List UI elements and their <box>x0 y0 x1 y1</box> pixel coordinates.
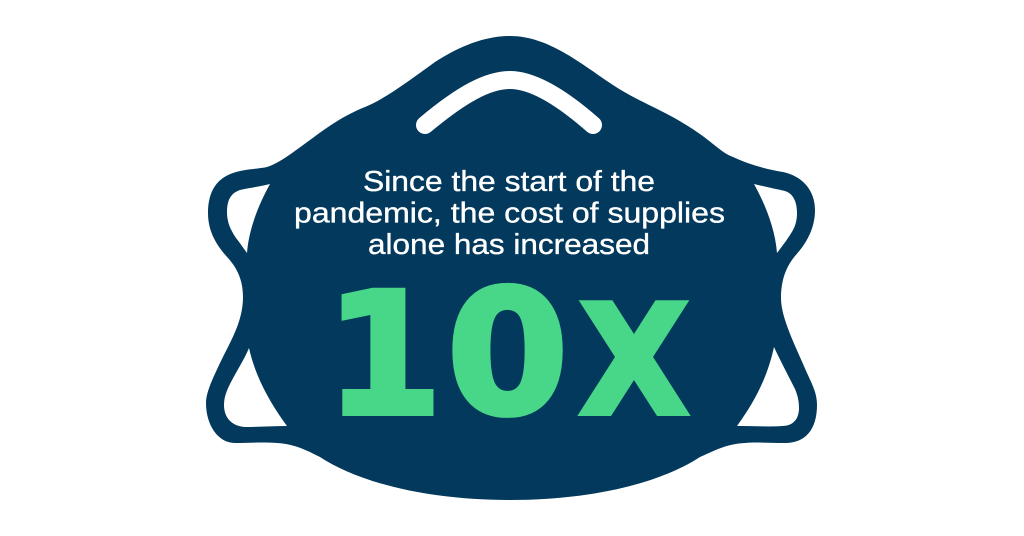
text block: description <box>294 166 725 261</box>
mask body with ear loops <box>206 36 817 500</box>
digit 1: 1 <box>325 256 443 454</box>
letter X: X <box>579 272 689 450</box>
icon: face mask <box>206 36 817 500</box>
line 3: alone has increased <box>368 229 650 261</box>
line 1: Since the start of the <box>363 166 655 198</box>
headline number: 10X <box>325 254 689 454</box>
line 2: pandemic, the cost of supplies <box>294 198 725 230</box>
digit 0: 0 <box>446 254 569 454</box>
nose wire <box>425 80 593 125</box>
